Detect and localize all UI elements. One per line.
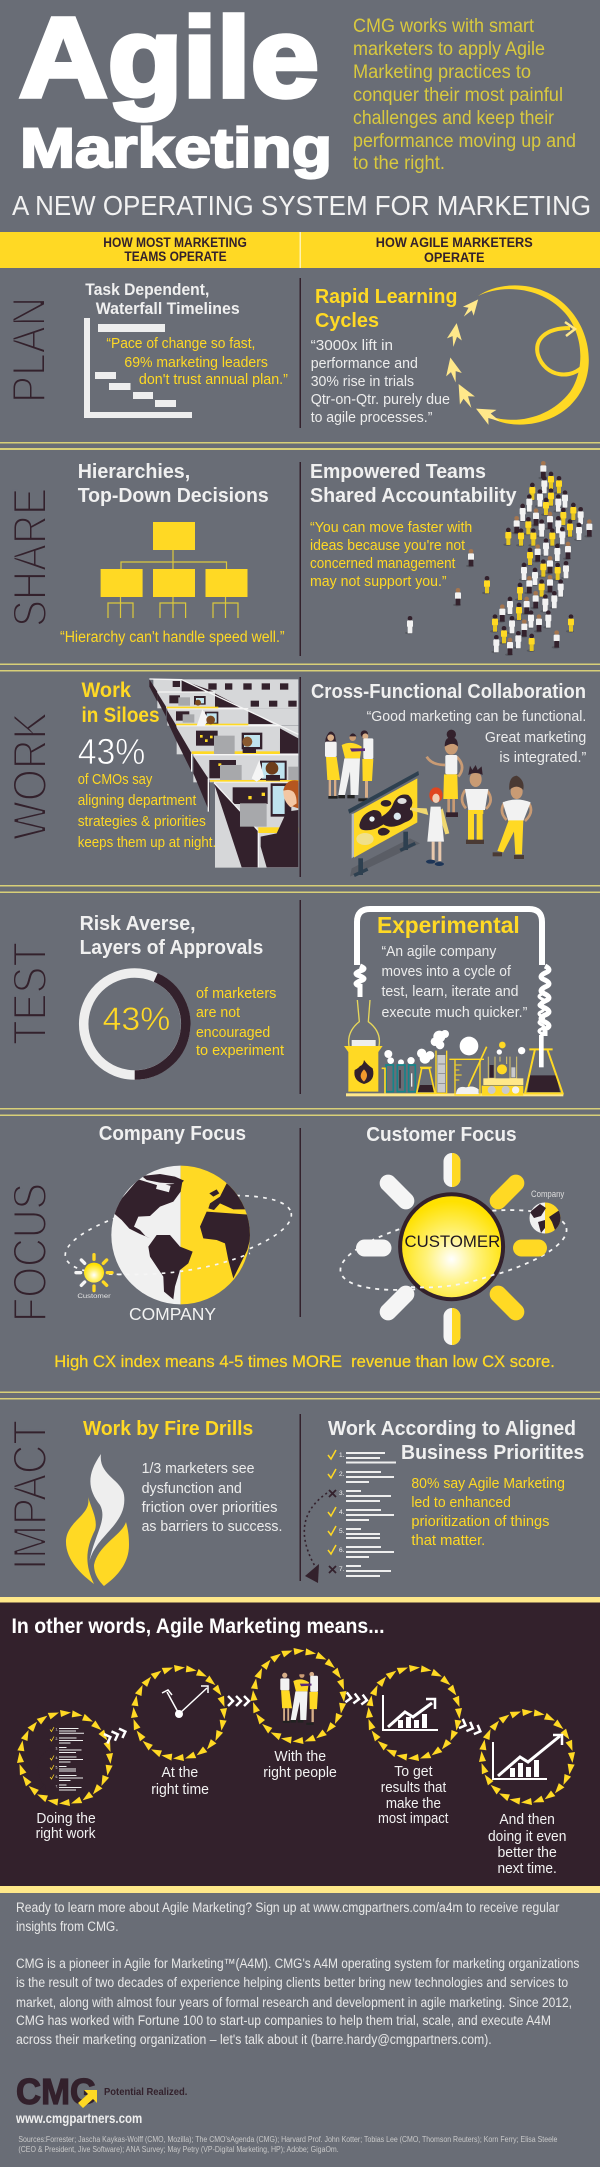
column header band: TEAMS OPERATE: [124, 249, 227, 264]
quote: 3000x lift: to agile processes.”: [311, 409, 432, 426]
label: TEST: TEST: [3, 942, 56, 1045]
title: Marketing: Marketing: [20, 116, 332, 179]
callout: CX index: High CX index means 4-5 times MORE revenue than low CX score.: [54, 1353, 555, 1371]
arrow chevrons 2: [228, 1696, 249, 1706]
title block: [12, 0, 591, 221]
label: IMPACT: IMPACT: [3, 1420, 56, 1570]
panel: plan: [2, 281, 589, 429]
arrow chevrons 4: [459, 1719, 482, 1736]
heading: hierarchies: [78, 461, 269, 507]
text: 80% stat: led to enhanced: [411, 1494, 511, 1511]
quote: 3000x lift: [311, 337, 450, 426]
icon: crowd forming an upward arrow: [405, 461, 592, 656]
step 4: most impact: most impact: [378, 1810, 449, 1827]
text: 80% stat: prioritization of things: [411, 1513, 550, 1530]
intro paragraph: [353, 16, 576, 174]
quote: agile company: “An agile company: [382, 943, 497, 960]
quote: 3000x lift: Qtr-on-Qtr. purely due: [311, 391, 450, 408]
icon: lab tube frame: [356, 909, 549, 1036]
text: dysfunction stat: [142, 1460, 282, 1535]
icon: priority checklist: 7.: [339, 1566, 345, 1573]
column header band: HOW MOST MARKETING: [103, 235, 247, 250]
panel: agile marketing means: [0, 1597, 600, 1893]
panel: impact: [3, 1418, 584, 1586]
panel: test: [3, 909, 563, 1096]
heading: experimental: Experimental: [377, 912, 520, 938]
icon: priority checklist: 6.: [339, 1547, 345, 1554]
arrow chevrons 3: [345, 1692, 368, 1705]
quote: 3000x lift: “3000x lift in: [311, 337, 393, 354]
quote: move faster: [310, 519, 472, 590]
heading: aligned priorities: [328, 1418, 584, 1464]
step 1: right work: Doing the: [36, 1810, 96, 1827]
illustration: company globe: [59, 1165, 298, 1324]
logo: CMG: [16, 2071, 188, 2112]
illustration: customer sun: Company: [531, 1189, 565, 1199]
illustration: company globe: Customer: [77, 1293, 112, 1300]
quote: agile company: [382, 943, 527, 1021]
panel: share: [3, 461, 592, 656]
illustration: customer sun: CUSTOMER: [404, 1232, 500, 1251]
heading: in other words: In other words, Agile Marketing means...: [12, 1615, 384, 1638]
stat description: [196, 985, 285, 1059]
step 2: right time: At the: [162, 1764, 198, 1781]
heading: task dependent: Task Dependent,: [85, 281, 209, 299]
quote: pace of change: “Pace of change so fast,: [106, 335, 255, 352]
heading: hierarchies: Top-Down Decisions: [78, 485, 269, 507]
quote: hierarchy: “Hierarchy can't handle speed well.”: [60, 629, 285, 646]
text: about CMG: [16, 1956, 580, 2047]
text: call to action: [16, 1900, 560, 1934]
quote: 3000x lift: 30% rise in trials: [311, 373, 414, 390]
quote: pace of change: don't trust annual plan.”: [139, 371, 288, 388]
text: about CMG: across their marketing organization – let's talk about it (barre.hardy@cmgpartners.com).: [16, 2032, 492, 2047]
step 5: even better: [479, 1709, 575, 1877]
heading: aligned priorities: Business Prioritites: [401, 1442, 584, 1464]
heading: rapid learning cycles: [315, 286, 457, 332]
quote: good marketing: “Good marketing can be functional.: [367, 708, 586, 725]
panel: footer: [15, 1900, 580, 2154]
illustration: lab equipment: [344, 990, 563, 1096]
text: website: www.cmgpartners.com: [15, 2111, 142, 2126]
heading: work in siloes: [82, 679, 160, 727]
icon: priority checklist: [304, 1450, 396, 1583]
icon: priority checklist: 5.: [339, 1528, 345, 1535]
heading: empowered teams: [310, 461, 517, 507]
quote: agile company: moves into a cycle of: [382, 963, 512, 980]
step 4: most impact: make the: [386, 1795, 441, 1812]
quote: pace of change: [106, 335, 288, 388]
step 4: most impact: results that: [381, 1779, 447, 1796]
icon: priority checklist: 1.: [339, 1452, 345, 1459]
quote: good marketing: Great marketing: [485, 729, 586, 746]
icon: priority checklist: 3.: [339, 1490, 345, 1497]
quote: move faster: “You can move faster with: [310, 519, 472, 536]
intro paragraph: performance moving up and: [353, 131, 576, 152]
intro paragraph: to the right.: [353, 153, 445, 174]
label: WORK: WORK: [3, 712, 56, 840]
quote: good marketing: is integrated.”: [499, 749, 586, 766]
quote: 3000x lift: performance and: [311, 355, 418, 372]
stat description: aligning department: [78, 792, 197, 809]
stat description: strategies & priorities: [78, 813, 206, 830]
logo: CMG: Potential Realized.: [104, 2087, 188, 2098]
text: about CMG: CMG has worked with Fortune 100 to start-up companies to help them trial, scale, and execute A4M: [16, 2013, 551, 2028]
intro paragraph: challenges and keep their: [353, 108, 555, 129]
stat description: of CMOs say: [78, 771, 153, 788]
quote: agile company: execute much quicker.”: [382, 1004, 527, 1021]
illustration: customer sun: [334, 1153, 573, 1345]
heading: rapid learning cycles: Cycles: [315, 310, 379, 332]
step 5: even better: And then: [499, 1811, 555, 1828]
org chart: [101, 522, 247, 618]
heading: hierarchies: Hierarchies,: [78, 461, 190, 483]
stat description: to experiment: [196, 1042, 285, 1059]
step 4: most impact: [366, 1665, 462, 1827]
stat description: are not: [196, 1004, 241, 1021]
step 3: right people: [250, 1648, 346, 1781]
intro paragraph: conquer their most painful: [353, 85, 563, 106]
text: sources: [18, 2135, 558, 2154]
illustration: cubicles: [149, 679, 298, 868]
text: 80% stat: that matter.: [411, 1532, 485, 1549]
text: dysfunction stat: dysfunction and: [142, 1480, 242, 1497]
text: call to action: insights from CMG.: [16, 1919, 119, 1934]
step 5: even better: better the: [498, 1844, 557, 1861]
intro paragraph: Marketing practices to: [353, 62, 531, 83]
illustration: company globe: COMPANY: [129, 1304, 216, 1324]
icon: priority checklist: 4.: [339, 1509, 345, 1516]
heading: task dependent: [85, 281, 240, 318]
column header band: OPERATE: [424, 250, 484, 265]
text: sources: (CEO & President, Jive Software); ANA Survey; May Petry (VP-Digital Marketing, HP); Adobe; GigaOm.: [18, 2145, 339, 2154]
heading: rapid learning cycles: Rapid Learning: [315, 286, 457, 308]
heading: risk averse: Risk Averse,: [80, 913, 196, 935]
stat: 43%: 43%: [78, 731, 145, 772]
step 5: even better: doing it even: [488, 1828, 566, 1845]
panel: focus: [3, 1123, 573, 1371]
heading: risk averse: Layers of Approvals: [80, 937, 263, 959]
heading: empowered teams: Empowered Teams: [310, 461, 486, 483]
step 3: right people: right people: [263, 1764, 337, 1781]
waterfall chart: [84, 318, 192, 418]
illustration: team at whiteboard: [325, 730, 531, 877]
heading: aligned priorities: Work According to Aligned: [328, 1418, 576, 1440]
intro paragraph: marketers to apply Agile: [353, 39, 545, 60]
heading: task dependent: Waterfall Timelines: [96, 300, 240, 318]
step 1: right work: right work: [36, 1825, 96, 1842]
heading: customer focus: Customer Focus: [366, 1124, 517, 1146]
heading: work in siloes: Work: [82, 679, 131, 702]
heading: fire drills: Work by Fire Drills: [83, 1418, 253, 1440]
quote: move faster: ideas because you're not: [310, 537, 466, 554]
quote: good marketing: [367, 708, 586, 766]
quote: pace of change: 69% marketing leaders: [124, 354, 268, 371]
arrow chevrons 1: [104, 1727, 127, 1743]
step 1: right work: [17, 1710, 113, 1842]
step 2: right time: [131, 1665, 227, 1798]
step 5: even better: next time.: [498, 1860, 557, 1877]
label: PLAN: PLAN: [2, 297, 55, 403]
icon: flame: [66, 1454, 129, 1586]
quote: agile company: test, learn, iterate and: [382, 983, 518, 1000]
text: 80% stat: [411, 1475, 565, 1549]
donut chart 43%: [84, 973, 186, 1075]
intro paragraph: CMG works with smart: [353, 16, 535, 37]
heading: company focus: Company Focus: [99, 1123, 246, 1145]
text: dysfunction stat: friction over priorities: [142, 1499, 278, 1516]
column header band: HOW AGILE MARKETERS: [376, 235, 533, 250]
heading: work in siloes: in Siloes: [82, 704, 160, 727]
step 4: most impact: To get: [394, 1763, 433, 1780]
quote: move faster: may not support you.”: [310, 573, 447, 590]
text: dysfunction stat: 1/3 marketers see: [142, 1460, 254, 1477]
stat description: [78, 771, 216, 851]
stat description: keeps them up at night.: [78, 834, 216, 851]
step 3: right people: With the: [274, 1748, 326, 1765]
section dividers: [0, 278, 600, 1581]
heading: risk averse: [80, 913, 263, 959]
panel: work: [3, 679, 586, 877]
icon: priority checklist: 2.: [339, 1471, 345, 1478]
stat description: of marketers: [196, 985, 276, 1002]
label: SHARE: SHARE: [3, 488, 56, 627]
logo: CMG: CMG: [16, 2071, 97, 2112]
stat description: encouraged: [196, 1024, 270, 1041]
text: dysfunction stat: as barriers to success.: [142, 1518, 282, 1535]
quote: move faster: concerned management: [310, 555, 456, 572]
label: FOCUS: FOCUS: [3, 1183, 56, 1322]
column header band: [0, 232, 600, 268]
step 2: right time: right time: [151, 1781, 209, 1798]
text: 80% stat: 80% say Agile Marketing: [411, 1475, 565, 1492]
icon: learning spiral: [443, 285, 589, 429]
heading: empowered teams: Shared Accountability: [310, 485, 517, 507]
donut chart 43%: 43%: [103, 1001, 170, 1037]
